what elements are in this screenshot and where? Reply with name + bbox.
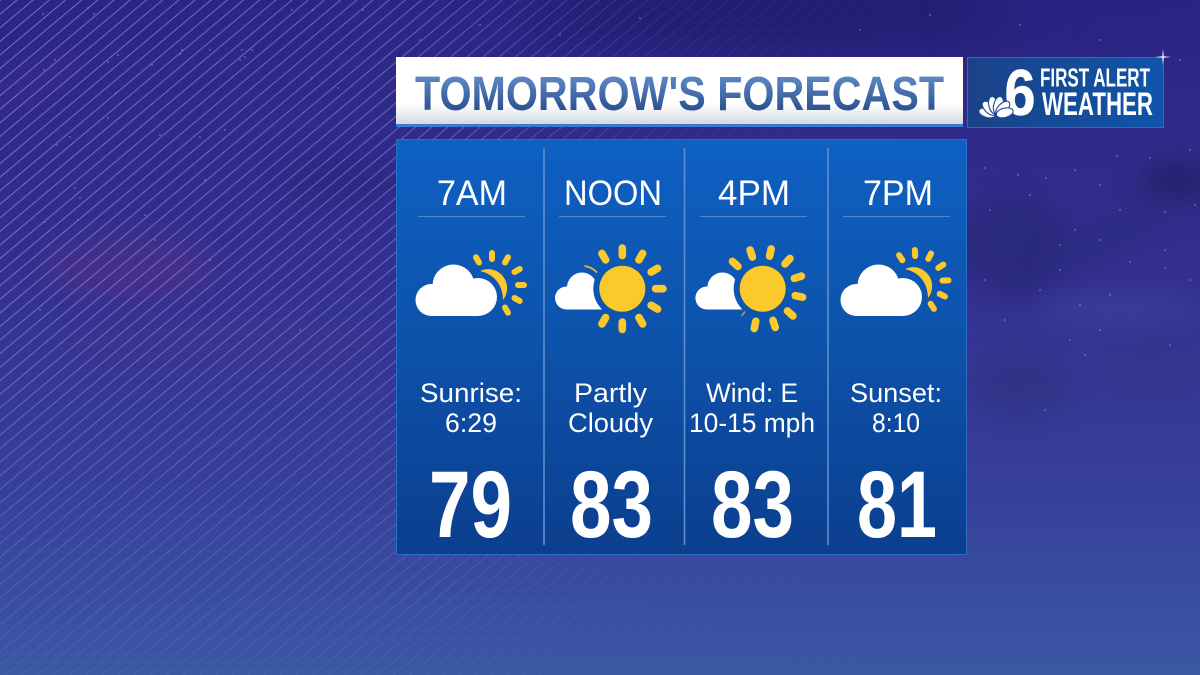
icon: cloud and sun [416, 250, 527, 317]
condition text: Wind: E [706, 378, 798, 408]
temperature: 83 [711, 452, 794, 558]
column: 7AM [416, 174, 527, 558]
column: NOON [555, 174, 667, 558]
icon: sun and cloud [695, 244, 807, 333]
icon: NBC peacock [978, 95, 1014, 119]
icon: cloud and sun [840, 247, 952, 316]
icon: sun and cloud [555, 244, 667, 333]
column: 7PM: 8:10 [872, 408, 920, 438]
condition text: Sunrise: [420, 378, 522, 408]
time label: 7AM [437, 174, 507, 213]
logo numeral: 6 [1004, 56, 1036, 129]
time label: NOON [564, 174, 662, 213]
time label: 4PM [718, 174, 790, 213]
logo text: weather: WEATHER [1042, 86, 1153, 122]
temperature: 83 [570, 452, 653, 558]
background: diagonal stripes [0, 0, 797, 675]
condition text: Partly [574, 378, 648, 408]
temperature: 81 [857, 452, 937, 558]
sparkle [1155, 49, 1171, 65]
title bar [396, 57, 963, 127]
column: 7AM: 6:29 [445, 408, 497, 438]
condition text: Sunset: [850, 378, 942, 408]
column: 4PM: 10-15 mph [689, 408, 815, 438]
panel: forecast table [396, 140, 966, 558]
time label: 7PM [863, 174, 933, 213]
column: NOON: Cloudy [568, 408, 654, 438]
column: 7PM [840, 174, 952, 558]
logo: NBC 6 First Alert Weather [968, 56, 1164, 129]
title: TOMORROW'S FORECAST [415, 68, 944, 121]
temperature: 79 [429, 452, 512, 558]
column: 4PM [689, 174, 815, 558]
